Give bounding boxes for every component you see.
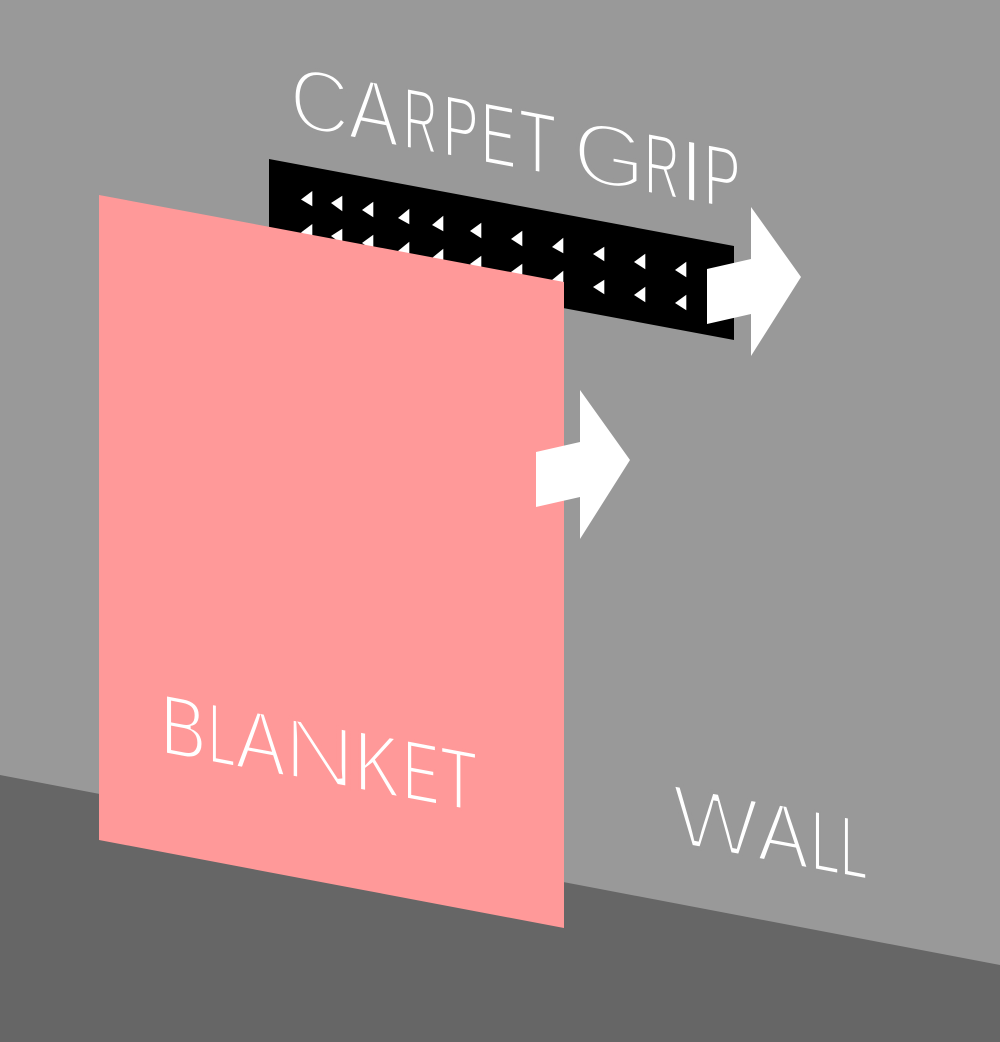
label: carpet grip: G — [573, 101, 646, 212]
label: blanket: K — [354, 711, 400, 816]
label: carpet grip: C — [289, 48, 350, 157]
label: blanket: A — [236, 690, 285, 795]
label: carpet grip: R — [403, 70, 438, 174]
label: blanket — [160, 675, 477, 831]
label: blanket: N — [283, 699, 356, 809]
grip strip — [269, 159, 734, 340]
label: wall: A — [758, 783, 809, 888]
label: blanket: B — [160, 675, 206, 780]
label: wall: L — [840, 797, 868, 898]
label: carpet grip: E — [481, 84, 516, 188]
label: wall: W — [672, 767, 759, 879]
label: carpet grip: A — [349, 59, 399, 166]
grip tacks — [301, 191, 686, 310]
label: carpet grip: P — [443, 76, 479, 181]
label: blanket: T — [440, 728, 477, 831]
label: carpet grip: I — [680, 120, 703, 223]
blanket panel — [99, 195, 564, 928]
label: blanket: E — [402, 721, 439, 824]
label: wall — [672, 767, 868, 898]
carpet grip strip with tacks — [269, 159, 734, 340]
arrow: blanket direction — [536, 390, 630, 539]
label: carpet grip: T — [519, 91, 556, 196]
label: wall: L — [811, 792, 840, 894]
label: carpet grip — [289, 48, 741, 230]
floor — [0, 775, 1000, 1042]
arrow: carpet grip direction — [707, 207, 801, 356]
label: carpet grip: R — [644, 114, 680, 219]
label: carpet grip: P — [703, 124, 741, 230]
label: blanket: L — [208, 684, 236, 785]
